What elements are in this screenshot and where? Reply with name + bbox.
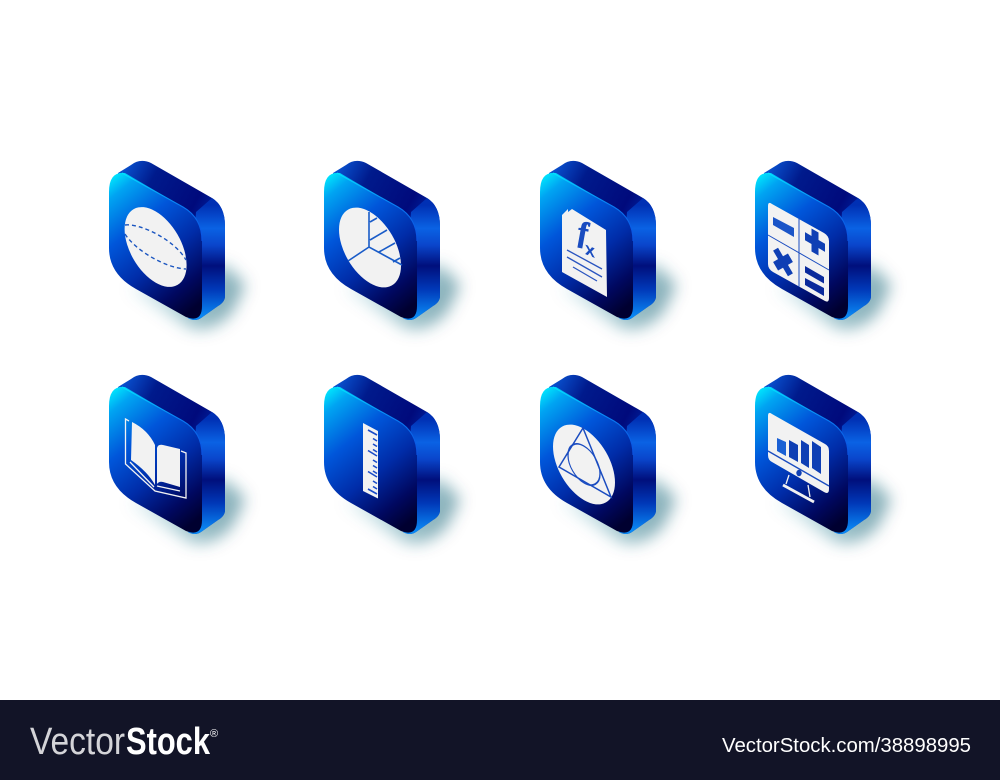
icon tile: monitor with bar chart [755, 375, 891, 543]
image id: VectorStock.com/38898995 [722, 735, 971, 757]
icon tile: ruler [324, 375, 460, 543]
icon tile: pie chart [324, 161, 460, 329]
formula symbol: f [578, 216, 591, 251]
icon tile: formula document [540, 161, 676, 329]
icon tile: sphere [109, 161, 245, 329]
brand logo: ® [210, 728, 218, 740]
icon tile: calculator symbols [755, 161, 891, 329]
icon tile: formula document: x [585, 238, 596, 262]
brand logo: Vector [30, 721, 125, 763]
icon tile: triangle and circles [540, 375, 676, 543]
brand logo [30, 721, 218, 763]
icon tile: open book [109, 375, 245, 543]
footer bar [0, 700, 1000, 780]
brand logo: Stock [126, 721, 211, 763]
